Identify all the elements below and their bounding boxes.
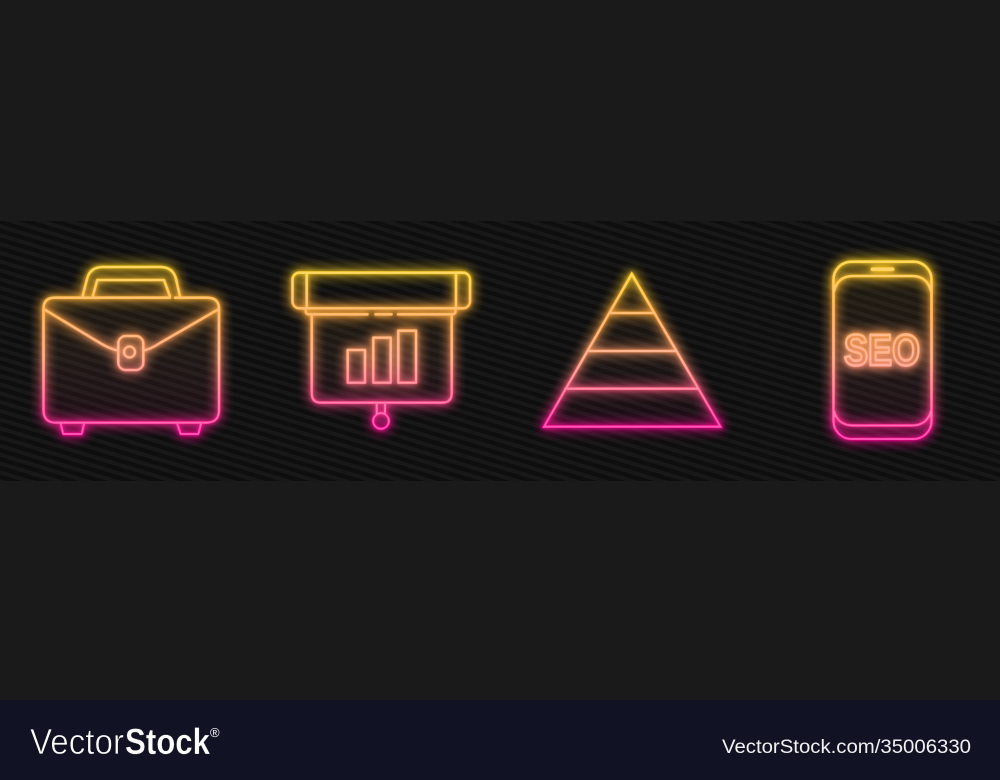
VectorStock logo: Stock [125, 721, 211, 762]
icon: smartphone with SEO [834, 262, 932, 439]
icon: briefcase [44, 267, 219, 434]
SEO label: SEO [844, 326, 920, 375]
image id URL: VectorStock.com/35006330 [722, 736, 971, 758]
VectorStock logo: Vector [30, 721, 124, 762]
striped band [0, 221, 1000, 481]
icon: presentation board with bar chart [292, 273, 470, 429]
VectorStock logo: ® [210, 725, 220, 740]
icon: layered pyramid [544, 274, 720, 427]
VectorStock logo [30, 721, 220, 762]
footer bar [0, 700, 1000, 780]
